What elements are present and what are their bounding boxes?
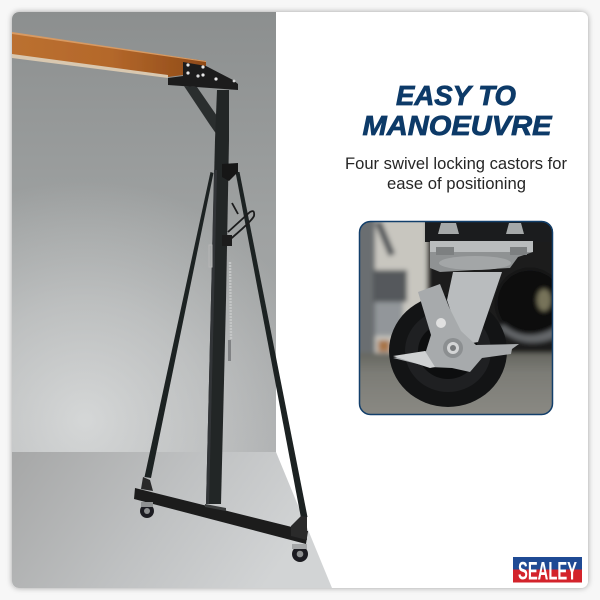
left foot plate — [141, 477, 153, 491]
description text: Four swivel locking castors for — [345, 155, 567, 173]
right leg — [236, 172, 308, 518]
wall light glow — [12, 218, 276, 452]
base bar — [134, 488, 308, 544]
castor fork — [447, 272, 502, 345]
brake rivet — [436, 318, 446, 328]
top bracket — [168, 62, 238, 90]
axle nut — [443, 338, 463, 358]
blurred workshop floor — [355, 353, 559, 419]
steel beam — [12, 32, 206, 78]
photo background — [359, 221, 553, 415]
blurred machine at left — [355, 217, 407, 357]
panel: product photo — [12, 12, 332, 588]
description text — [345, 155, 567, 193]
title: MANOEUVRE — [362, 110, 553, 141]
column — [206, 90, 229, 504]
left leg — [144, 172, 214, 478]
panel: castor photo — [355, 217, 564, 419]
title — [362, 80, 553, 141]
left castor — [140, 502, 154, 518]
hinge block — [222, 163, 238, 181]
brake arm — [393, 284, 519, 372]
right foot plate — [291, 516, 307, 540]
gantry crane — [12, 32, 308, 562]
diagonal brace — [184, 86, 217, 135]
wall backdrop — [12, 12, 276, 452]
blurred wheel at right — [498, 270, 552, 346]
right castor — [292, 544, 308, 562]
winch handle — [209, 203, 254, 361]
title: EASY TO — [396, 80, 516, 111]
floor — [12, 452, 332, 588]
mounting plate and bolts — [425, 222, 553, 272]
description text: ease of positioning — [387, 175, 526, 193]
castor wheel — [389, 295, 507, 407]
castor photo border — [360, 222, 552, 414]
bright window area — [371, 222, 432, 356]
